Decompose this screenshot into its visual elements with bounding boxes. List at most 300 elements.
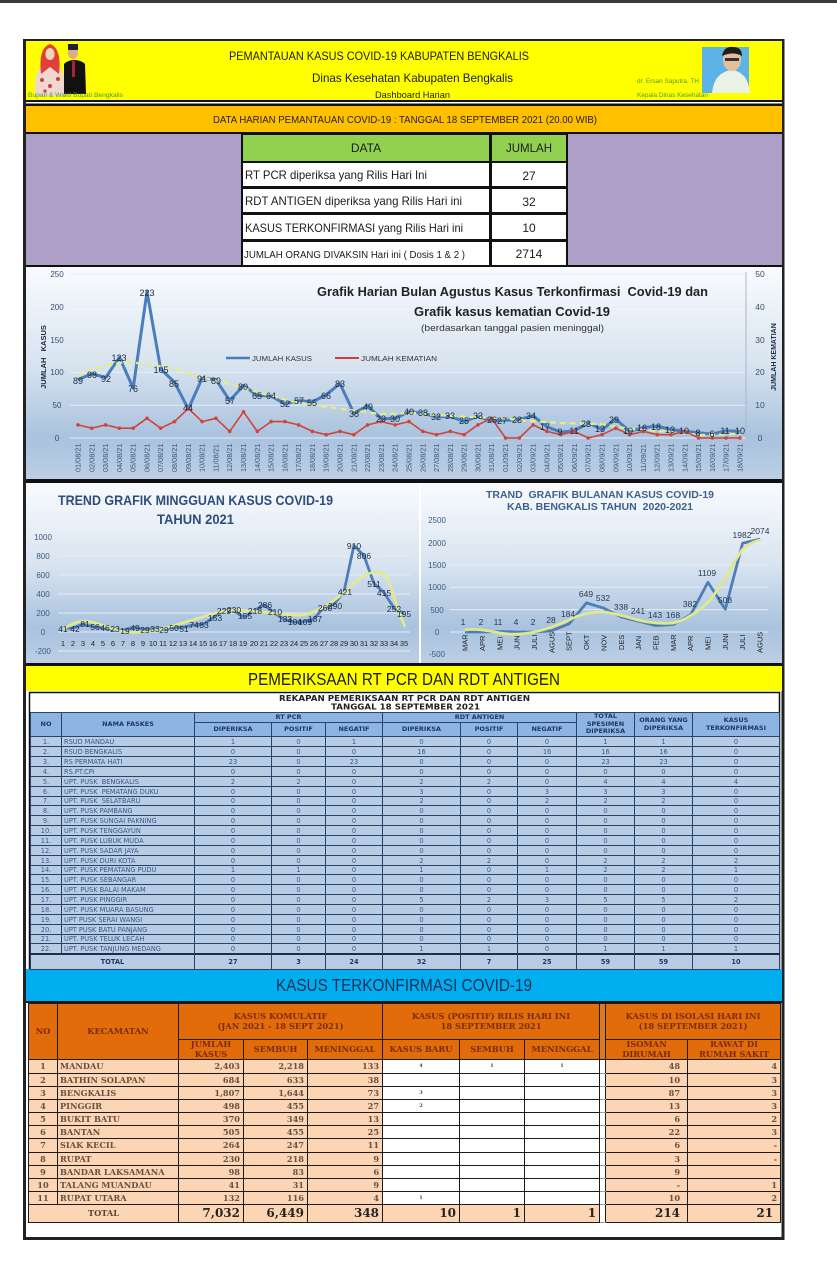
heading: RT PCR and RDT antigen: PEMERIKSAAN RT PCR DAN RDT ANTIGEN xyxy=(248,669,560,689)
table: confirmed cases by subdistrict: - xyxy=(774,1154,777,1164)
table: RT PCR and RDT antigen testing recap: 0 xyxy=(352,797,356,805)
table: RT PCR and RDT antigen testing recap: 0 xyxy=(419,768,424,776)
table: RT PCR and RDT antigen testing recap: 2 xyxy=(661,797,666,805)
right axis labels: 40 xyxy=(755,302,765,312)
table: RT PCR and RDT antigen testing recap: 0 xyxy=(734,935,738,943)
table: RT PCR and RDT antigen testing recap: 0 xyxy=(231,836,235,844)
table: confirmed cases by subdistrict: 370 xyxy=(223,1114,240,1124)
table: RT PCR and RDT antigen testing recap: 0 xyxy=(352,816,356,824)
monthly y axis labels: -500 xyxy=(429,650,446,659)
monthly x axis labels: DES xyxy=(617,635,626,650)
heading: confirmed cases xyxy=(26,969,782,1001)
summary row: vaccinated: JUMLAH ORANG DIVAKSIN Hari ini ( Dosis 1 & 2 ) xyxy=(244,250,465,261)
data labels: weekly: 74 xyxy=(189,620,199,630)
chart note: (berdasarkan tanggal pasien meninggal) xyxy=(421,323,604,334)
table: RT PCR and RDT antigen testing recap: 0 xyxy=(545,826,549,834)
monthly x axis labels: NOV xyxy=(599,635,608,651)
monthly x axis labels: JUNI xyxy=(513,633,522,650)
table: RT PCR and RDT antigen testing recap: 0 xyxy=(661,876,666,884)
table: confirmed cases by subdistrict: MENINGGAL xyxy=(532,1044,593,1054)
summary row: vaccinated xyxy=(243,242,566,265)
weekly y axis labels: 600 xyxy=(36,571,50,580)
table: RT PCR and RDT antigen testing recap: UPT. PUSK TENGGAYUN xyxy=(64,826,141,834)
monthly chart subtitle: KAB. BENGKALIS TAHUN 2020-2021 xyxy=(507,502,693,513)
table: confirmed cases by subdistrict: 3 xyxy=(419,1090,423,1096)
weekly chart panel xyxy=(26,483,419,663)
table: RT PCR and RDT antigen testing recap: 2 xyxy=(734,896,738,904)
monthly y axis labels: 1000 xyxy=(428,583,446,592)
table: confirmed cases by subdistrict: SEMBUH xyxy=(470,1044,514,1054)
table: RT PCR and RDT antigen testing recap: 0 xyxy=(352,926,356,934)
table: confirmed cases by subdistrict: 498 xyxy=(223,1100,240,1110)
data labels: weekly: 260 xyxy=(318,603,332,613)
data labels: weekly: 29 xyxy=(159,625,169,635)
icon: head of health office photo xyxy=(702,47,750,93)
table: RT PCR and RDT antigen testing recap: 0 xyxy=(545,935,549,943)
date axis labels: 09/09/21 xyxy=(611,444,620,472)
table: RT PCR and RDT antigen testing recap: 1 xyxy=(296,866,301,874)
table: RT PCR and RDT antigen testing recap: 0 xyxy=(419,906,424,914)
table: RT PCR and RDT antigen testing recap: 3 xyxy=(419,788,424,796)
weekly x axis labels: 5 xyxy=(101,639,105,648)
monthly x axis labels: SEPT xyxy=(565,631,574,651)
weekly x axis labels: 26 xyxy=(310,639,318,648)
monthly x axis labels: JAN xyxy=(634,636,643,650)
date axis labels: 24/08/21 xyxy=(391,444,400,472)
table: RT PCR and RDT antigen testing recap: 0 xyxy=(545,856,549,864)
weekly x axis labels: 8 xyxy=(131,639,135,648)
data labels: monthly: 649 xyxy=(579,589,593,599)
date axis labels: 20/08/21 xyxy=(336,444,344,472)
table: RT PCR and RDT antigen testing recap: 1 xyxy=(487,944,491,952)
table: RT PCR and RDT antigen testing recap: 0 xyxy=(296,944,301,952)
data labels: cases: 80 xyxy=(238,382,248,392)
table: RT PCR and RDT antigen testing recap: RS.PT.CPI xyxy=(64,768,95,776)
data labels: cases: 30 xyxy=(390,414,400,424)
right axis title: JUMLAH KEMATIAN xyxy=(771,323,778,391)
table: RT PCR and RDT antigen testing recap: 0 xyxy=(734,738,738,746)
data labels: monthly: 4 xyxy=(514,617,519,627)
monthly chart panel xyxy=(421,483,782,663)
data labels: weekly: 46 xyxy=(100,623,110,633)
date axis labels: 02/09/21 xyxy=(515,444,524,472)
data labels: weekly: 50 xyxy=(169,623,179,633)
table: confirmed cases by subdistrict: 13 xyxy=(368,1114,379,1124)
table: confirmed cases by subdistrict: 13 xyxy=(669,1100,680,1110)
data labels: weekly: 51 xyxy=(179,624,189,634)
weekly x axis labels: 32 xyxy=(370,639,378,648)
monthly y axis labels: 2500 xyxy=(428,516,446,525)
table: RT PCR and RDT antigen testing recap: 14. xyxy=(41,866,51,874)
weekly x axis labels xyxy=(61,639,408,648)
weekly x axis labels: 21 xyxy=(260,639,268,648)
table: RT PCR and RDT antigen testing recap: DIPERIKSA xyxy=(586,727,625,735)
table: confirmed cases by subdistrict: KASUS KOMULATIF xyxy=(234,1011,327,1021)
table: confirmed cases by subdistrict: 7 xyxy=(40,1140,46,1150)
table: RT PCR and RDT antigen testing recap: 0 xyxy=(296,836,301,844)
data labels: weekly: 137 xyxy=(308,614,322,624)
table: RT PCR and RDT antigen testing recap: 0 xyxy=(419,926,424,934)
data labels: weekly: 49 xyxy=(130,623,140,633)
data labels: cases: 10 xyxy=(735,426,745,436)
monthly y axis labels: 500 xyxy=(430,606,444,615)
monthly x axis labels xyxy=(460,631,765,653)
data labels: cases: 38 xyxy=(349,409,359,419)
table: RT PCR and RDT antigen testing recap: 0 xyxy=(296,906,301,914)
dashboard label: Dashboard Harian xyxy=(375,90,450,101)
table: confirmed cases by subdistrict: KASUS xyxy=(195,1048,227,1058)
date axis labels: 30/08/21 xyxy=(473,444,482,472)
data labels: cases: 76 xyxy=(128,384,138,394)
weekly x axis labels: 20 xyxy=(250,639,258,648)
date axis labels: 15/08/21 xyxy=(267,444,276,472)
table: RT PCR and RDT antigen testing recap: 0 xyxy=(352,856,356,864)
table: confirmed cases by subdistrict: 73 xyxy=(368,1088,379,1098)
data labels: cases: 29 xyxy=(376,414,386,424)
data labels: weekly: 229 xyxy=(217,606,231,616)
table: RT PCR and RDT antigen testing recap: 0 xyxy=(545,846,549,854)
table: RT PCR and RDT antigen testing recap: 1 xyxy=(352,738,356,746)
data labels: cases: 85 xyxy=(169,379,179,389)
table: RT PCR and RDT antigen testing recap: 0 xyxy=(487,748,491,756)
table: RT PCR and RDT antigen testing recap: 0 xyxy=(352,748,356,756)
table: RT PCR and RDT antigen testing recap: 0 xyxy=(296,916,301,924)
summary row: confirmed: 10 xyxy=(522,221,536,235)
data labels: cases: 64 xyxy=(266,391,276,401)
left axis labels: 200 xyxy=(50,303,64,312)
weekly y axis labels: 200 xyxy=(36,609,50,618)
table: RT PCR and RDT antigen testing recap: SPESIMEN xyxy=(587,720,624,728)
table: RT PCR and RDT antigen testing recap: UPT. PUSK DURI KOTA xyxy=(64,856,135,864)
table: RT PCR and RDT antigen testing recap: 0 xyxy=(734,886,738,894)
table: confirmed cases by subdistrict: 5 xyxy=(40,1114,46,1124)
data labels: monthly: 28 xyxy=(546,615,556,625)
table: confirmed cases by subdistrict: 2,218 xyxy=(278,1061,304,1071)
date axis labels: 02/08/21 xyxy=(87,444,96,472)
table: RT PCR and RDT antigen testing recap: 2 xyxy=(419,856,424,864)
table: RT PCR and RDT antigen testing recap: 3 xyxy=(296,958,301,966)
table: RT PCR and RDT antigen testing recap: 0 xyxy=(734,748,738,756)
table: RT PCR and RDT antigen testing recap: 3 xyxy=(545,788,549,796)
table: confirmed cases by subdistrict: 116 xyxy=(287,1192,304,1202)
weekly x axis labels: 19 xyxy=(239,639,247,648)
weekly x axis labels: 31 xyxy=(360,639,368,648)
monthly y axis labels: 1500 xyxy=(428,561,446,570)
data labels: cases: 89 xyxy=(73,376,83,386)
weekly chart title: TREND GRAFIK MINGGUAN KASUS COVID-19 xyxy=(58,492,333,508)
data labels: cases: 52 xyxy=(280,399,290,409)
data labels: weekly: 230 xyxy=(227,605,241,615)
table: RT PCR and RDT antigen testing recap: 0 xyxy=(419,935,424,943)
data labels: cases: 17 xyxy=(540,422,550,432)
table: RT PCR and RDT antigen testing recap: 0 xyxy=(231,916,235,924)
table: RT PCR and RDT antigen testing recap: 2 xyxy=(661,866,666,874)
table: confirmed cases by subdistrict: RUPAT UTARA xyxy=(60,1192,127,1202)
table: RT PCR and RDT antigen testing recap: 0 xyxy=(487,788,491,796)
weekly y axis labels: 1000 xyxy=(34,533,52,542)
table: confirmed cases by subdistrict: 133 xyxy=(362,1061,379,1071)
summary row: RDT antigen: 32 xyxy=(522,195,536,209)
table: RT PCR and RDT antigen testing recap: 0 xyxy=(231,906,235,914)
date axis labels: 14/08/21 xyxy=(253,444,262,472)
table: RT PCR and RDT antigen testing recap: 0 xyxy=(734,826,738,834)
table: RT PCR and RDT antigen testing recap: 0 xyxy=(487,797,491,805)
table: RT PCR and RDT antigen testing recap: 0 xyxy=(296,886,301,894)
table: RT PCR and RDT antigen testing recap: 10 xyxy=(731,958,741,966)
table: RT PCR and RDT antigen testing recap: 0 xyxy=(352,896,356,904)
table: RT PCR and RDT antigen testing recap: 0 xyxy=(419,758,424,766)
right axis labels: 30 xyxy=(755,335,765,345)
table: confirmed cases by subdistrict: TOTAL xyxy=(88,1208,119,1218)
date banner: DATA HARIAN PEMANTAUAN COVID-19 : TANGGAL 18 SEPTEMBER 2021 (20.00 WIB) xyxy=(213,115,597,126)
table: confirmed cases by subdistrict: MANDAU xyxy=(60,1061,104,1071)
table: confirmed cases by subdistrict: 6 xyxy=(40,1126,46,1136)
date axis labels: 18/09/21 xyxy=(735,444,744,472)
table: confirmed cases by subdistrict: 1 xyxy=(560,1063,564,1069)
left axis labels: 50 xyxy=(53,401,62,410)
date axis labels: 17/08/21 xyxy=(294,444,303,472)
table: RT PCR and RDT antigen testing recap: 0 xyxy=(296,816,301,824)
table: confirmed cases by subdistrict: 633 xyxy=(287,1074,304,1084)
weekly y axis labels: 800 xyxy=(36,552,50,561)
table: RT PCR and RDT antigen testing recap: 0 xyxy=(296,876,301,884)
date axis labels: 08/08/21 xyxy=(170,444,179,472)
data labels: cases: 89 xyxy=(211,376,221,386)
table: confirmed cases by subdistrict: 264 xyxy=(223,1140,240,1150)
table: RT PCR and RDT antigen testing recap: 2 xyxy=(419,797,424,805)
table: RT PCR and RDT antigen testing recap: 4 xyxy=(734,778,738,786)
table: RT PCR and RDT antigen testing recap: 0 xyxy=(734,876,738,884)
table: RT PCR and RDT antigen testing recap: 7 xyxy=(487,958,491,966)
table: RT PCR and RDT antigen testing recap: 32 xyxy=(417,958,426,966)
data labels: cases: 10 xyxy=(623,426,633,436)
table: RT PCR and RDT antigen testing recap: 0 xyxy=(231,935,235,943)
table: RT PCR and RDT antigen testing recap: 2 xyxy=(487,896,491,904)
date banner xyxy=(26,106,782,132)
date axis labels: 22/08/21 xyxy=(363,444,372,472)
data labels: cases: 33 xyxy=(445,411,455,421)
weekly x axis labels: 35 xyxy=(400,639,408,648)
data labels: weekly: 23 xyxy=(110,624,120,634)
line: weekly cases xyxy=(63,546,404,630)
table: confirmed cases by subdistrict: 3 xyxy=(674,1154,680,1164)
weekly x axis labels: 25 xyxy=(300,639,308,648)
table: RT PCR and RDT antigen testing recap: 0 xyxy=(231,816,235,824)
table: RT PCR and RDT antigen testing recap: 0 xyxy=(419,876,424,884)
data labels: monthly: 532 xyxy=(596,593,610,603)
table: confirmed cases by subdistrict: BANDAR LAKSAMANA xyxy=(60,1166,165,1176)
table: RT PCR and RDT antigen testing recap: 0 xyxy=(603,876,608,884)
table: confirmed cases by subdistrict: 1 xyxy=(40,1061,46,1071)
chart title: Grafik Harian Bulan Agustus Kasus Terkonfirmasi Covid-19 dan xyxy=(317,285,708,299)
weekly x axis labels: 13 xyxy=(179,639,187,648)
table: RT PCR and RDT antigen testing recap: UPT. PUSK BALAI MAKAM xyxy=(64,886,146,894)
date axis labels: 06/08/21 xyxy=(142,444,152,472)
table: RT PCR and RDT antigen testing recap: 23 xyxy=(350,758,358,766)
weekly x axis labels: 4 xyxy=(91,639,95,648)
date axis labels: 04/09/21 xyxy=(542,444,551,472)
table: confirmed cases by subdistrict: - xyxy=(774,1140,777,1150)
date axis labels: 12/09/21 xyxy=(653,444,662,472)
table: RT PCR and RDT antigen testing recap: UPT. PUSK MUARA BASUNG xyxy=(64,906,154,914)
monthly x axis labels: JUNI xyxy=(721,633,730,650)
table: RT PCR and RDT antigen testing recap xyxy=(30,712,780,970)
date axis labels: 13/09/21 xyxy=(666,444,676,472)
table: RT PCR and RDT antigen testing recap: 2 xyxy=(419,778,424,786)
date axis labels: 11/09/21 xyxy=(639,444,648,472)
data labels: weekly: 252 xyxy=(387,604,401,614)
table: confirmed cases by subdistrict: 1,644 xyxy=(278,1088,304,1098)
table: RT PCR and RDT antigen testing recap: 0 xyxy=(296,826,301,834)
date axis labels: 18/08/21 xyxy=(308,444,317,472)
table: RT PCR and RDT antigen testing recap: 6. xyxy=(43,788,49,796)
table: RT PCR and RDT antigen testing recap: 2 xyxy=(545,797,549,805)
table: RT PCR and RDT antigen testing recap: 0 xyxy=(487,816,491,824)
date axis labels: 07/08/21 xyxy=(156,444,165,472)
table: RT PCR and RDT antigen testing recap: 1 xyxy=(419,944,424,952)
table: RT PCR and RDT antigen testing recap: 1 xyxy=(734,866,738,874)
table: RT PCR and RDT antigen testing recap: 0 xyxy=(487,866,491,874)
table: RT PCR and RDT antigen testing recap: 2 xyxy=(603,856,608,864)
weekly x axis labels: 11 xyxy=(159,639,167,648)
table: confirmed cases by subdistrict: 7,032 xyxy=(202,1206,240,1220)
monthly x axis labels: OKT xyxy=(582,634,591,650)
table: confirmed cases by subdistrict: 18 SEPTEMBER 2021 xyxy=(441,1020,541,1030)
monthly x axis labels: AGUS xyxy=(756,632,765,653)
table: RT PCR and RDT antigen testing recap: 0 xyxy=(231,768,235,776)
data labels: cases: 9 xyxy=(557,427,563,437)
date axis labels: 08/09/21 xyxy=(598,444,606,472)
table: RT PCR and RDT antigen testing recap: UPT. PUSK SADAR JAYA xyxy=(64,846,138,854)
table: RT PCR and RDT antigen testing recap: 1. xyxy=(43,738,49,746)
table: RT PCR and RDT antigen testing recap: 0 xyxy=(487,738,491,746)
weekly x axis labels: 18 xyxy=(229,639,237,648)
table: RT PCR and RDT antigen testing recap: 0 xyxy=(352,876,356,884)
table: RT PCR and RDT antigen testing recap: 0 xyxy=(296,896,301,904)
legend: JUMLAH KEMATIAN xyxy=(361,354,437,363)
date axis labels: 28/08/21 xyxy=(446,444,455,472)
date axis labels: 23/08/21 xyxy=(377,444,386,472)
table: RT PCR and RDT antigen testing recap: 0 xyxy=(231,926,235,934)
data labels: weekly: 81 xyxy=(80,619,90,629)
table: RT PCR and RDT antigen testing recap: 0 xyxy=(419,816,424,824)
weekly x axis labels: 16 xyxy=(209,639,217,648)
table: RT PCR and RDT antigen testing recap: 0 xyxy=(487,806,491,814)
table: confirmed cases by subdistrict: KECAMATAN xyxy=(87,1026,149,1036)
table: confirmed cases by subdistrict: 214 xyxy=(655,1206,680,1220)
table: confirmed cases by subdistrict: 38 xyxy=(368,1074,379,1084)
summary row: RT PCR: 27 xyxy=(522,169,536,183)
monthly chart title: TRAND GRAFIK BULANAN KASUS COVID-19 xyxy=(486,490,714,501)
table: RT PCR and RDT antigen testing recap: 2 xyxy=(487,856,491,864)
table: RT PCR and RDT antigen testing recap: 0 xyxy=(545,906,549,914)
data labels: weekly: 133 xyxy=(278,614,292,624)
legend: JUMLAH KASUS xyxy=(252,354,312,363)
table: RT PCR and RDT antigen testing recap: 0 xyxy=(231,846,235,854)
table: RT PCR and RDT antigen testing recap: 0 xyxy=(661,846,666,854)
table: RT PCR and RDT antigen testing recap: RSUD BENGKALIS xyxy=(64,748,122,756)
icon: regent and vice regent photo xyxy=(35,44,86,96)
table: confirmed cases by subdistrict: 247 xyxy=(287,1140,304,1150)
table: RT PCR and RDT antigen testing recap: 1 xyxy=(603,944,608,952)
table: confirmed cases by subdistrict: 10 xyxy=(439,1206,456,1220)
table: RT PCR and RDT antigen testing recap: UPT. PUSK TELUK LECAH xyxy=(64,935,144,943)
table: RT PCR and RDT antigen testing recap: 0 xyxy=(487,758,491,766)
data labels: monthly: 1982 xyxy=(733,530,752,540)
right axis labels: 0 xyxy=(758,433,763,443)
table: confirmed cases by subdistrict: BATHIN SOLAPAN xyxy=(60,1074,145,1084)
table: confirmed cases by subdistrict: 9 xyxy=(674,1166,680,1176)
table: confirmed cases by subdistrict: 6,449 xyxy=(266,1206,304,1220)
table: confirmed cases by subdistrict: 9 xyxy=(373,1154,379,1164)
date axis labels: 13/08/21 xyxy=(239,444,248,472)
data labels: weekly: 806 xyxy=(357,551,371,561)
monthly y axis labels: 0 xyxy=(435,628,440,637)
data labels: weekly: 83 xyxy=(199,620,209,630)
table: confirmed cases by subdistrict: 2 xyxy=(419,1102,423,1108)
table: RT PCR and RDT antigen testing recap: 0 xyxy=(231,876,235,884)
table: RT PCR and RDT antigen testing recap: TOTAL xyxy=(101,958,124,966)
table: confirmed cases by subdistrict: (18 SEPTEMBER 2021) xyxy=(639,1020,747,1030)
data labels: cases: 40 xyxy=(404,407,414,417)
weekly x axis labels: 17 xyxy=(219,639,227,648)
monthly x axis labels: APR xyxy=(686,635,695,651)
data labels: weekly: 286 xyxy=(258,600,272,610)
table: RT PCR and RDT antigen testing recap: UPT. PUSK PEMATANG PUDU xyxy=(64,866,156,874)
data labels: weekly: 56 xyxy=(90,622,100,632)
table: RT PCR and RDT antigen testing recap: 4. xyxy=(43,768,49,776)
table: RT PCR and RDT antigen testing recap: 1 xyxy=(661,738,666,746)
table: confirmed cases by subdistrict: SEMBUH xyxy=(254,1044,297,1054)
summary row: RDT antigen xyxy=(243,189,566,212)
table: RT PCR and RDT antigen testing recap: DIPERIKSA xyxy=(213,725,253,733)
table: RT PCR and RDT antigen testing recap: 16 xyxy=(417,748,426,756)
table: RT PCR and RDT antigen testing recap: 0 xyxy=(296,846,301,854)
table: RT PCR and RDT antigen testing recap: 1 xyxy=(419,866,424,874)
table: confirmed cases by subdistrict: (JAN 2021 - 18 SEPT 2021) xyxy=(217,1020,344,1030)
table: confirmed cases by subdistrict: 10 xyxy=(669,1192,680,1202)
table: confirmed cases by subdistrict: 455 xyxy=(287,1126,304,1136)
right axis labels: 20 xyxy=(755,367,765,377)
table: RT PCR and RDT antigen testing recap: 0 xyxy=(661,836,666,844)
data labels: weekly: 42 xyxy=(70,624,80,634)
table: RT PCR and RDT antigen testing recap: UPT. PUSK LUBUK MUDA xyxy=(64,836,144,844)
date axis labels: 12/08/21 xyxy=(225,444,234,472)
table: RT PCR and RDT antigen testing recap: 0 xyxy=(545,916,549,924)
table: RT PCR and RDT antigen testing recap: 16 xyxy=(543,748,551,756)
table: confirmed cases by subdistrict: 6 xyxy=(674,1140,680,1150)
daily chart panel xyxy=(26,267,782,479)
table: confirmed cases by subdistrict: 9 xyxy=(40,1166,46,1176)
data labels: cases: 29 xyxy=(609,415,619,425)
table: confirmed cases by subdistrict: 4 xyxy=(40,1100,46,1110)
right axis labels xyxy=(755,269,765,443)
data labels: cases: 23 xyxy=(581,419,591,429)
table: RT PCR and RDT antigen testing recap: 59 xyxy=(659,958,668,966)
table: RT PCR and RDT antigen testing recap: 19. xyxy=(41,916,51,924)
table: RT PCR and RDT antigen testing recap: 0 xyxy=(603,816,608,824)
data labels: cases: 11 xyxy=(720,426,730,436)
data labels: weekly: 155 xyxy=(238,611,252,621)
table: RT PCR and RDT antigen testing recap: 2 xyxy=(661,856,666,864)
table: RT PCR and RDT antigen testing recap: 0 xyxy=(734,906,738,914)
monthly x axis labels: MEI xyxy=(704,637,712,650)
weekly y axis labels: -200 xyxy=(35,647,52,656)
table: RT PCR and RDT antigen testing recap: 0 xyxy=(603,916,608,924)
table: RT PCR and RDT antigen testing recap: 16. xyxy=(41,886,51,894)
data labels: cases: 16 xyxy=(637,423,647,433)
date axis labels: 10/09/21 xyxy=(625,444,634,472)
